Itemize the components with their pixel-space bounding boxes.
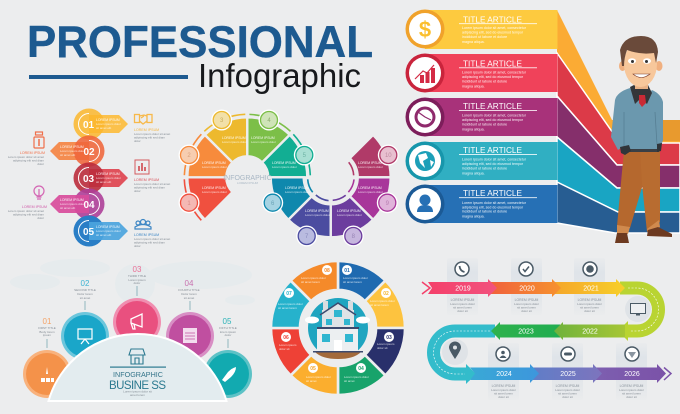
dome: INFOGRAPHIC [113, 370, 163, 379]
row 3 arrows: 2024 [496, 371, 512, 378]
panel: house wheel [257, 247, 419, 409]
row 1 arrows: 2019 [455, 286, 471, 292]
segment captions [202, 136, 383, 217]
card captions: LOREM IPSUM [515, 298, 539, 302]
number badges: 1 [187, 201, 191, 207]
step 04: 04 [83, 200, 95, 211]
bar: red [406, 54, 558, 92]
bar: blue: TITLE ARTICLE [463, 189, 522, 198]
caption: people [134, 233, 170, 248]
bar: teal: magna aliqua. [462, 172, 485, 176]
number badges: 03 [386, 335, 392, 341]
segment copy: Lorem ipsum dolor [301, 276, 326, 280]
caption: handshake: adipiscing elit sed diam [134, 136, 166, 140]
bar: blue: Lorem ipsum dolor sit amet, consectetur [462, 201, 527, 205]
bar: purple: Lorem ipsum dolor sit amet, consectetur [462, 114, 527, 118]
step 03: 03 [83, 174, 94, 185]
segment copy: sit amet lorem [301, 280, 320, 284]
icons row 3 [496, 347, 639, 361]
caption: bar chart: dolor [134, 189, 141, 193]
row 1 arrows [428, 279, 625, 297]
label 05: dolor [225, 333, 231, 337]
label 01: ipsum [43, 333, 51, 337]
caption: people: adipiscing elit sed diam [134, 240, 166, 244]
bar: red: adipiscing elit, sed do eiusmod tempor [462, 75, 524, 79]
icon: bar chart [135, 160, 149, 174]
wheel centre label: LOREM IPSUM [237, 181, 258, 185]
bar: red: Lorem ipsum dolor sit amet, consectetur [462, 70, 527, 74]
label 05: 05 [223, 317, 232, 326]
icon: location pin [442, 339, 468, 365]
start chevron [422, 282, 430, 294]
segment captions: Lorem ipsum dolor [202, 165, 227, 169]
label 02 [74, 279, 96, 310]
right bend [618, 288, 658, 341]
step 02: 02 [83, 147, 95, 158]
icon: light bulb [34, 186, 44, 199]
card captions: sit amet lorem [558, 392, 577, 396]
cards [447, 258, 647, 400]
step 04: Lorem ipsum dolor [60, 202, 85, 206]
circle 03 [113, 298, 161, 346]
row 2 arrows [491, 322, 625, 340]
segment copy: Lorem ipsum dolor [343, 276, 368, 280]
segment copy: Lorem ipsum dolor [344, 375, 369, 379]
panel: title article ribbons [406, 10, 680, 243]
segment captions: LOREM IPSUM [285, 186, 309, 190]
caption: people: Lorem ipsum dolor sit amet [134, 237, 170, 241]
panel: ten segment wheel [172, 102, 403, 250]
label 03: dolor [134, 281, 140, 285]
label 04: sit amet [184, 296, 194, 300]
number badges: 5 [303, 153, 307, 159]
panel: timeline [422, 258, 671, 400]
caption: bottle [8, 151, 45, 166]
caption: light bulb: Lorem ipsum dolor sit amet [8, 209, 44, 213]
number badges: 07 [286, 291, 292, 297]
caption: handshake: dolor [134, 139, 141, 143]
bar: teal: adipiscing elit, sed do eiusmod tempor [462, 162, 524, 166]
caption: bottle: Lorem ipsum dolor sit amet [8, 155, 44, 159]
caption: bottle: adipiscing elit sed diam [13, 158, 44, 162]
row 2 arrows: 2022 [582, 328, 598, 336]
step 04: sit amet elit [60, 206, 75, 210]
number badges: 04 [358, 366, 364, 372]
label 03 [128, 265, 146, 296]
segment captions: Lorem ipsum dolor [222, 140, 247, 144]
step 03 [74, 162, 128, 194]
card captions: dolor sit [521, 309, 532, 313]
number badges [178, 110, 399, 246]
character: man [611, 36, 672, 243]
caption: light bulb: adipiscing elit sed diam [13, 212, 44, 216]
bar: yellow: $ [419, 17, 431, 42]
step 05: 05 [83, 227, 94, 238]
step 03: sit amet elit [96, 180, 111, 184]
step 01 [74, 108, 128, 140]
card captions: dolor sit [562, 395, 573, 399]
segment captions: Lorem ipsum dolor [272, 165, 297, 169]
number badges: 3 [220, 118, 224, 124]
icon: house [305, 298, 370, 359]
bar: blue [406, 184, 558, 224]
bar: blue: incididunt ut labore et dolore [462, 210, 507, 214]
ribbons [557, 10, 680, 233]
number badges [281, 265, 394, 373]
step 04 [50, 188, 104, 220]
end chevron [664, 368, 671, 380]
caption: light bulb: dolor [37, 216, 44, 220]
label 03: Lorem ipsum [128, 278, 146, 282]
left bend [434, 331, 495, 384]
icon: bottle [34, 132, 44, 148]
label 03: THIRD TITLE [128, 274, 146, 278]
label 01 [38, 317, 56, 348]
bar: red: incididunt ut labore et dolore [462, 80, 507, 84]
segment copy: sit amet lorem [370, 303, 389, 307]
segment captions: Lorem ipsum dolor [251, 140, 276, 144]
number badges: 02 [383, 291, 389, 297]
segment captions: LOREM IPSUM [272, 161, 296, 165]
step 02: LOREM IPSUM [60, 145, 84, 149]
card captions: Lorem ipsum dolor [514, 302, 539, 306]
bar: purple: adipiscing elit, sed do eiusmod tempor [462, 118, 524, 122]
segment captions: Lorem ipsum dolor [337, 213, 362, 217]
bar: red: TITLE ARTICLE [463, 59, 522, 68]
label 02: Dolor lorem [77, 292, 93, 296]
card captions: dolor sit [626, 395, 637, 399]
card captions: Lorem ipsum dolor [555, 388, 580, 392]
title [27, 18, 373, 94]
card captions: dolor sit [584, 309, 595, 313]
caption: handshake: Lorem ipsum dolor sit amet [134, 132, 170, 136]
dome [48, 334, 226, 401]
label 02: SECOND TITLE [74, 288, 96, 292]
segment copy [278, 276, 395, 383]
segment copy: dolor sit [279, 347, 290, 351]
card captions: LOREM IPSUM [578, 298, 602, 302]
bar: purple [406, 98, 558, 136]
bar: yellow: Lorem ipsum dolor sit amet, consectetur [462, 26, 527, 30]
panel: numbered arrows 01-05 [8, 108, 170, 248]
card captions: sit amet lorem [622, 392, 641, 396]
icons row 1 [455, 262, 597, 276]
segment captions: Lorem ipsum dolor [358, 190, 383, 194]
card captions: sit amet lorem [494, 392, 513, 396]
segment copy: Lorem ipsum dolor [278, 302, 303, 306]
number badges: 8 [352, 234, 356, 240]
caption: bar chart [134, 178, 170, 193]
segment captions: LOREM IPSUM [337, 209, 361, 213]
row 3 arrows: 2025 [560, 371, 576, 378]
title: Infographic [198, 57, 361, 94]
step 05: LOREM IPSUM [96, 225, 120, 229]
row 1 arrows: 2020 [519, 286, 535, 292]
segment captions: LOREM IPSUM [358, 186, 382, 190]
title: PROFESSIONAL [27, 18, 373, 67]
bar: teal: TITLE ARTICLE [463, 146, 522, 155]
card captions: LOREM IPSUM [620, 384, 644, 388]
card captions: Lorem ipsum dolor [450, 302, 475, 306]
dome: BUSINE SS [109, 380, 166, 392]
number badges: 6 [271, 201, 275, 207]
step 05 [74, 216, 128, 246]
segment copy: Lorem ipsum dolor [370, 299, 395, 303]
segment copy: sit amet lorem [343, 280, 362, 284]
segment captions: LOREM IPSUM [358, 161, 382, 165]
right half wheel segments [271, 135, 403, 250]
step 04: LOREM IPSUM [60, 198, 84, 202]
label 01: 01 [43, 317, 52, 326]
step 01: LOREM IPSUM [96, 118, 120, 122]
card captions: sit amet lorem [517, 306, 536, 310]
number badges: 05 [310, 366, 316, 372]
label 04: FOURTH TITLE [178, 288, 200, 292]
segment captions: LOREM IPSUM [202, 161, 226, 165]
step 02: Lorem ipsum dolor [60, 149, 85, 153]
segment copy: Lorem ipsum [279, 343, 297, 347]
circle 02 [61, 312, 109, 360]
label 02: sit amet [80, 296, 90, 300]
label 04 [178, 279, 200, 310]
wheel centre label: INFOGRAPHIC [223, 175, 272, 182]
bar: yellow: TITLE ARTICLE [463, 15, 522, 24]
step 01: sit amet elit [96, 126, 111, 130]
card captions: LOREM IPSUM [451, 298, 475, 302]
left half wheel segments [172, 102, 310, 220]
caption: bar chart: adipiscing elit sed diam [134, 186, 166, 190]
segment captions: LOREM IPSUM [202, 186, 226, 190]
number badges: 10 [385, 153, 392, 159]
bar: blue: magna aliqua. [462, 214, 485, 218]
bar: teal [406, 142, 558, 180]
circle 04 [166, 312, 214, 360]
caption: bottle: dolor [37, 162, 44, 166]
segment captions: Lorem ipsum dolor [202, 190, 227, 194]
dome: amet lorem [130, 393, 145, 397]
caption: people: LOREM IPSUM [134, 233, 159, 237]
segment captions: Lorem ipsum dolor [305, 213, 330, 217]
segment copy: sit amet [306, 379, 317, 383]
label 05: FIFTH TITLE [219, 326, 237, 330]
label 04: Dolor lorem [181, 292, 197, 296]
card captions: sit amet lorem [453, 306, 472, 310]
step 03: Lorem ipsum dolor [96, 176, 121, 180]
caption: handshake: LOREM IPSUM [134, 128, 159, 132]
bar: yellow: incididunt ut labore et dolore [462, 35, 507, 39]
icon: handshake [134, 114, 152, 124]
step 05: sit amet elit [96, 233, 111, 237]
world map backdrop [10, 259, 255, 305]
bar: red: magna aliqua. [462, 84, 485, 88]
number badges: 7 [305, 234, 309, 240]
number badges: 08 [324, 268, 330, 274]
bar: yellow [406, 10, 558, 49]
step 01: Lorem ipsum dolor [96, 122, 121, 126]
panel: infographic business dome [10, 259, 255, 401]
row 3 arrows [470, 364, 666, 383]
segment copy: sit amet lorem [278, 306, 297, 310]
label 05 [219, 317, 237, 348]
circle 05 [204, 350, 252, 398]
bar: teal: incididunt ut labore et dolore [462, 166, 507, 170]
bar: teal: Lorem ipsum dolor sit amet, consectetur [462, 158, 527, 162]
segment copy: Lorem ipsum dolor [306, 375, 331, 379]
bar: yellow: adipiscing elit, sed do eiusmod tempor [462, 30, 524, 34]
icon: monitor [625, 296, 651, 322]
card captions: LOREM IPSUM [492, 384, 516, 388]
label 01: FIRST TITLE [38, 326, 56, 330]
label 01: Body lorem [39, 330, 55, 334]
card captions: Lorem ipsum dolor [577, 302, 602, 306]
card captions: Lorem ipsum dolor [619, 388, 644, 392]
segment captions: Lorem ipsum dolor [358, 165, 383, 169]
step 05: Lorem ipsum dolor [96, 229, 121, 233]
caption: bottle: LOREM IPSUM [20, 151, 45, 155]
step 01: 01 [83, 120, 94, 131]
card captions: LOREM IPSUM [556, 384, 580, 388]
label 05: lorem ipsum [220, 330, 237, 334]
icon: store [129, 349, 145, 364]
card captions: dolor sit [498, 395, 509, 399]
number badges: 06 [283, 335, 289, 341]
circle 01 [23, 350, 71, 398]
step 03: LOREM IPSUM [96, 172, 120, 176]
card captions: sit amet lorem [580, 306, 599, 310]
icon: people [135, 220, 151, 229]
step 02 [50, 136, 104, 166]
caption: light bulb [8, 205, 47, 220]
bar: yellow: magna aliqua. [462, 40, 485, 44]
caption: handshake [134, 128, 170, 143]
number badges: 2 [187, 153, 191, 159]
number badges: 9 [386, 201, 390, 207]
caption: bar chart: Lorem ipsum dolor sit amet [134, 182, 170, 186]
number badges: 4 [267, 118, 271, 124]
caption: bar chart: LOREM IPSUM [134, 178, 159, 182]
segment copy: sit amet [344, 379, 355, 383]
segment copy: dolor sit [377, 346, 388, 350]
segment copy: Lorem ipsum [377, 342, 395, 346]
row 3 arrows: 2026 [624, 371, 640, 378]
card captions: dolor sit [457, 309, 468, 313]
dome: Lorem ipsum dolor sit [123, 390, 152, 394]
row 1 arrows: 2021 [583, 286, 599, 292]
row 2 arrows: 2023 [518, 328, 534, 336]
segment captions: Lorem ipsum dolor [285, 190, 310, 194]
segment captions: LOREM IPSUM [222, 136, 246, 140]
card captions [450, 298, 644, 399]
step 02: sit amet elit [60, 153, 75, 157]
segment captions: LOREM IPSUM [251, 136, 275, 140]
number badges: 01 [344, 268, 350, 274]
caption: people: dolor [134, 244, 141, 248]
label 04: 04 [185, 279, 194, 288]
bar: blue: adipiscing elit, sed do eiusmod tempor [462, 206, 524, 210]
label 02: 02 [81, 279, 90, 288]
card captions: Lorem ipsum dolor [491, 388, 516, 392]
bar: purple: incididunt ut labore et dolore [462, 122, 507, 126]
bar: purple: TITLE ARTICLE [463, 102, 522, 111]
bar: purple: magna aliqua. [462, 128, 485, 132]
caption: light bulb: LOREM IPSUM [22, 205, 47, 209]
ring segments [257, 247, 419, 409]
segment captions: LOREM IPSUM [305, 209, 329, 213]
label 03: 03 [133, 265, 142, 274]
